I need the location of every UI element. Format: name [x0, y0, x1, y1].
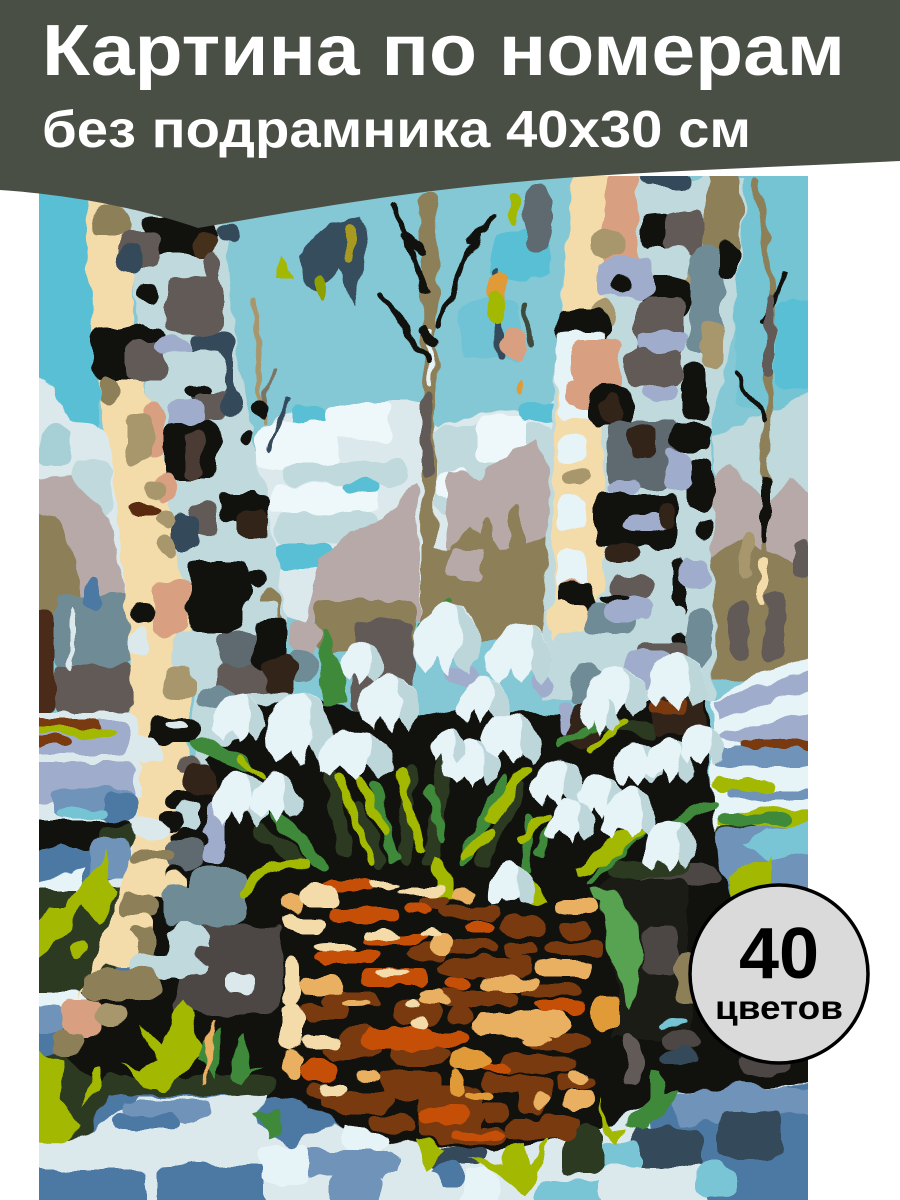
badge: 40 colours	[690, 885, 868, 1063]
badge: 40 colours: 40	[739, 914, 819, 994]
header banner	[0, 0, 900, 228]
dark earth	[25, 710, 825, 1150]
snowdrop flowers	[210, 604, 724, 910]
wicker basket	[279, 872, 620, 1150]
bottom grass	[25, 1000, 680, 1195]
painting backdrop	[39, 176, 808, 1200]
painting: snowdrops in a basket among birches	[25, 165, 825, 1200]
badge: 40 colours: цветов	[715, 989, 843, 1026]
lower left birch bark	[50, 755, 280, 1055]
bare thin trees	[253, 180, 788, 640]
title line 2: без подрамника 40х30 см	[42, 101, 751, 159]
left ground and snow bands	[25, 712, 140, 1035]
distant forest	[25, 440, 825, 715]
bottom snow	[25, 1083, 825, 1200]
snowdrop leaves	[200, 600, 718, 1008]
left birch trunk	[83, 190, 295, 830]
clouds	[39, 378, 808, 622]
sky	[39, 176, 808, 428]
right ground and snow bands	[708, 658, 808, 898]
hanging leaves	[278, 185, 551, 394]
right birch trunk	[540, 170, 745, 700]
title line 1: Картина по номерам	[42, 11, 845, 91]
